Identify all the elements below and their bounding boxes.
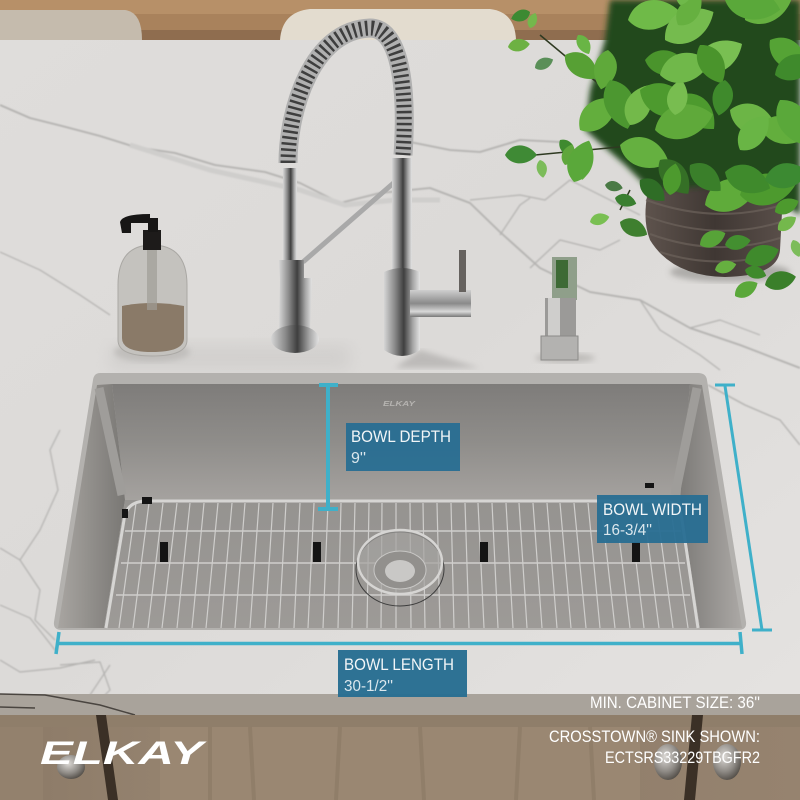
label: bowl width: 16-3/4'': [603, 522, 652, 539]
marble veins: [0, 105, 800, 715]
logo: Elkay: ELKAY: [40, 735, 207, 771]
spray head: [279, 260, 312, 332]
text: sink model: ECTSRS33229TBGFR2: [605, 749, 760, 767]
sink: [54, 373, 746, 630]
soap dispenser bottle: [114, 214, 190, 362]
brace arm: [303, 180, 397, 262]
label: bowl depth: 9'': [351, 450, 366, 467]
plant foliage: [505, 0, 800, 302]
drain and strainer: [356, 530, 444, 606]
coiled spring: [288, 28, 404, 163]
lever: [459, 250, 466, 292]
main column: [392, 158, 412, 273]
cabinet knobs: [57, 744, 741, 780]
dimension: bowl depth: [318, 383, 338, 511]
engraved logo: ELKAY: [383, 401, 417, 408]
sink shadow on counter: [110, 345, 350, 370]
cabinets: [0, 715, 800, 800]
back wall: [112, 384, 690, 500]
label: bowl width: [597, 495, 708, 543]
dimension: bowl width: [715, 385, 772, 630]
label: bowl depth: BOWL DEPTH: [351, 428, 451, 446]
rack bumpers and clips: [122, 483, 654, 562]
corner radius highlight: [99, 388, 697, 495]
label: bowl depth: [346, 423, 460, 471]
foliage backdrop: [585, 0, 800, 215]
text: minimum cabinet size: MIN. CABINET SIZE: 36'': [590, 694, 760, 712]
leaves: [505, 0, 800, 302]
left wall: [58, 384, 125, 628]
sink rim: [54, 373, 746, 630]
grid rack: [106, 501, 698, 628]
branches: [535, 35, 640, 210]
right wall: [680, 384, 742, 628]
head base: [271, 325, 319, 353]
sink floor: [104, 500, 700, 628]
faucet: [271, 28, 480, 368]
dimension: bowl length: [56, 632, 742, 654]
hose: [283, 168, 297, 260]
label: bowl length: BOWL LENGTH: [344, 656, 454, 674]
label: bowl length: [338, 650, 467, 697]
label: bowl width: BOWL WIDTH: [603, 501, 702, 519]
handle: [410, 290, 471, 317]
faucet body: [384, 268, 420, 356]
label: bowl length: 30-1/2'': [344, 678, 393, 695]
text: sink model: CROSSTOWN® SINK SHOWN:: [549, 728, 760, 746]
soap pump right of faucet: [535, 257, 595, 363]
background: table and chairs: [0, 0, 800, 42]
counter front edge: [0, 694, 800, 715]
faucet shadow: [395, 350, 480, 368]
text: sink model: [549, 728, 760, 767]
plant pot: [645, 175, 790, 282]
